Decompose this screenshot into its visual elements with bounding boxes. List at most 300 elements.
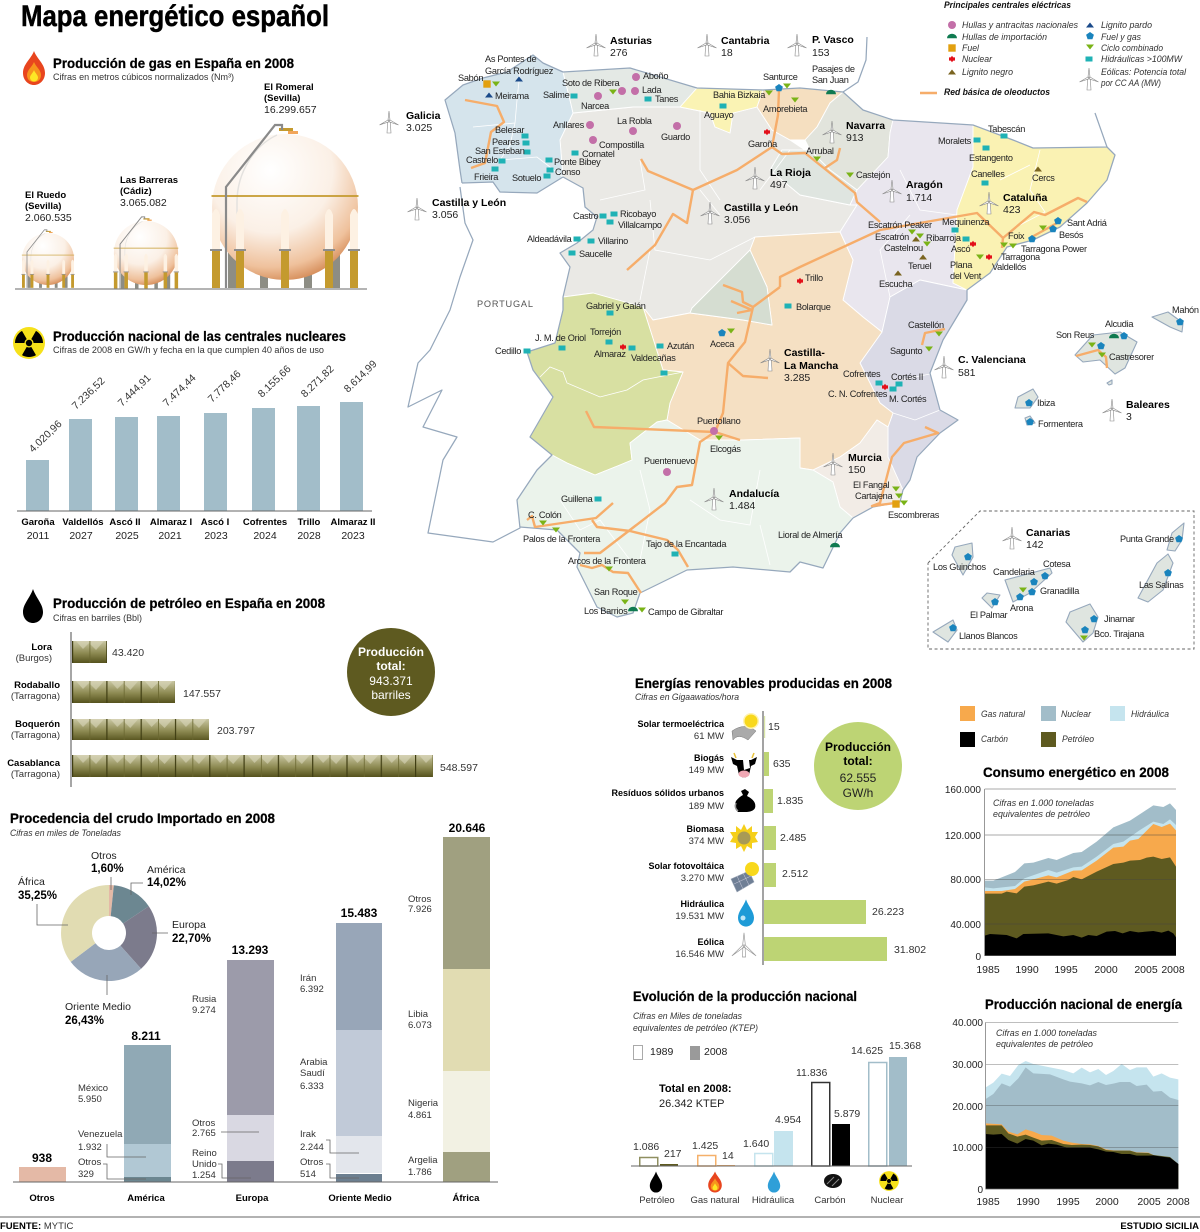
panel: oil production [7, 589, 478, 787]
renewables source labels [611, 719, 725, 960]
nuclear plant names: 2023 [204, 530, 228, 542]
plant name labels: Foix [1008, 231, 1025, 241]
production note: equivalentes de petróleo [996, 1039, 1093, 1050]
bar segment labels: Irak [300, 1129, 316, 1140]
region names and wind power values: 3.025 [406, 122, 432, 134]
consumption axis labels: 1985 [976, 964, 1000, 976]
legend: energy types: Carbón [981, 734, 1008, 745]
coast and border lines [408, 37, 1115, 617]
bar segment labels: Otros [192, 1118, 215, 1129]
bar chart: renewables: 26.223 [872, 906, 904, 918]
region names and wind power values: 1.484 [729, 500, 755, 512]
bar chart: renewables: 15 [768, 721, 780, 733]
plant name labels: Amorebieta [763, 104, 808, 114]
legend: energy types: Hidráulica [1131, 709, 1169, 720]
nuclear plant names: Almaraz II [331, 517, 375, 528]
bar segment labels: 2.765 [192, 1128, 216, 1139]
oil field labels: (Tarragona) [11, 730, 60, 741]
plant name labels: Arona [1010, 603, 1034, 613]
region names and wind power values: 142 [1026, 539, 1044, 551]
bar segment labels: 6.073 [408, 1020, 432, 1031]
bar category labels: América [127, 1193, 165, 1204]
region names and wind power values: 3.056 [724, 214, 750, 226]
evolution category icons and names [639, 1171, 903, 1206]
renewables source labels: 19.531 MW [675, 911, 724, 922]
plant name labels: Azután [667, 341, 694, 351]
nuclear plant names: 2028 [297, 530, 321, 542]
heading: production: Producción nacional de energía [985, 996, 1182, 1012]
plant name labels: El Palmar [970, 610, 1008, 620]
panel: gas production [15, 51, 367, 289]
renewables source labels: 61 MW [694, 731, 724, 742]
nuclear values: 8.155,66 [256, 363, 294, 400]
map legend: Hidráulicas >100MW [1101, 54, 1183, 65]
bar segment labels: 5.950 [78, 1094, 102, 1105]
plant name labels: Trillo [805, 273, 823, 283]
map legend: Lignito pardo [1101, 20, 1152, 31]
heading: renewables: Cifras en Gigaawatios/hora [635, 692, 739, 703]
production axis labels: 2008 [1166, 1196, 1190, 1208]
plant name labels: C. Colón [528, 510, 562, 520]
nuclear plant names: Valdellós [62, 517, 104, 528]
bar chart: evolution: 1.086 [633, 1141, 659, 1153]
evolution category icons and names: Gas natural [690, 1195, 740, 1206]
production axis labels: 30.000 [952, 1060, 983, 1071]
callout: total renewables: 62.555 [840, 771, 877, 785]
bar segment labels: Saudí [300, 1068, 325, 1079]
map legend: Lignito negro [962, 67, 1013, 78]
power plant markers: hydro [492, 94, 1008, 556]
bar chart: renewables: 1.835 [777, 795, 803, 807]
nuclear plant names: Ascó II [109, 517, 141, 528]
bar chart: evolution [631, 1040, 921, 1166]
callout: total renewables: Producción [825, 740, 891, 754]
consumption note: equivalentes de petróleo [993, 809, 1090, 820]
plant name labels: Compostilla [599, 140, 645, 150]
bar segment labels: 6.333 [300, 1081, 324, 1092]
tank labels [25, 82, 317, 224]
plant name labels: El Fangal [853, 480, 890, 490]
production axis labels: 1995 [1056, 1196, 1080, 1208]
legend: energy types: Petróleo [1062, 734, 1094, 745]
production axis labels: 10.000 [952, 1143, 983, 1154]
plant name labels: Saucelle [579, 249, 612, 259]
consumption axis labels: 1990 [1015, 964, 1039, 976]
bar segment labels: Venezuela [78, 1129, 123, 1140]
bar chart: evolution: 15.368 [889, 1040, 921, 1052]
map legend: por CC AA (MW) [1100, 78, 1161, 89]
heading: crude [10, 810, 275, 839]
plant name labels: Cortés II [891, 372, 923, 382]
bar chart: renewables: 31.802 [894, 944, 926, 956]
plant name labels: Las Salinas [1139, 580, 1184, 590]
region names and wind power values: Navarra [846, 120, 885, 132]
plant name labels: San Esteban [475, 146, 525, 156]
donut labels: 22,70% [172, 933, 211, 945]
plant name labels: Granadilla [1040, 586, 1080, 596]
region names and wind power values: 423 [1003, 204, 1021, 216]
region names and wind power values: Cataluña [1003, 192, 1048, 204]
plant name labels: As Pontes de [485, 54, 536, 64]
plant name labels: Estangento [969, 153, 1013, 163]
nuclear plant names: Trillo [298, 517, 321, 528]
bar segment labels: Libia [408, 1009, 429, 1020]
region names and wind power values: P. Vasco [812, 34, 854, 46]
bar segment labels: Rusia [192, 994, 217, 1005]
plant name labels: Frieira [474, 172, 499, 182]
plant name labels: C. N. Cofrentes [828, 389, 888, 399]
region names and wind power values: Aragón [906, 179, 943, 191]
plant name labels: Canelles [971, 169, 1005, 179]
bar chart: evolution: 1.425 [692, 1140, 718, 1152]
plant name labels: San Roque [594, 587, 638, 597]
plant name labels: Ricobayo [620, 209, 656, 219]
plant name labels: Tarragona Power [1021, 244, 1087, 254]
heading: crude: Cifras en miles de Toneladas [10, 828, 121, 839]
oil field labels: 548.597 [440, 762, 478, 774]
bar segment labels: 1.254 [192, 1170, 216, 1181]
legend: years: 1989 [650, 1046, 674, 1058]
plant name labels: Punta Grande [1120, 534, 1174, 544]
plant name labels: Castejón [856, 170, 890, 180]
legend: energy types [960, 706, 1169, 747]
panel: energy consumption [945, 764, 1185, 976]
donut labels: 35,25% [18, 890, 57, 902]
plant name labels: Pasajes de [812, 64, 855, 74]
plant name labels: Campo de Gibraltar [648, 607, 723, 617]
production axis labels: 1990 [1016, 1196, 1040, 1208]
donut labels: Oriente Medio [65, 1001, 131, 1013]
region names and wind power values: C. Valenciana [958, 354, 1026, 366]
consumption note: Cifras en 1.000 toneladas [993, 798, 1094, 809]
icon: radiation [13, 327, 45, 359]
plant name labels: Peares [492, 137, 520, 147]
renewables source labels: Resíduos sólidos urbanos [611, 788, 724, 798]
renewables source labels: Biogás [694, 753, 724, 763]
callout: total oil: Producción [358, 645, 424, 659]
heading: oil: Cifras en barriles (Bbl) [53, 613, 142, 624]
plant name labels: PORTUGAL [477, 299, 534, 309]
region names and wind power values: La Rioja [770, 167, 811, 179]
oil field labels: (Tarragona) [11, 691, 60, 702]
plant name labels: Puentenuevo [644, 456, 695, 466]
icon: cow [731, 753, 757, 778]
donut labels: América [147, 864, 186, 876]
callout: total oil: 943.371 [369, 674, 413, 688]
plant name labels: Cofrentes [843, 369, 881, 379]
plant name labels: Teruel [908, 261, 932, 271]
plant name labels: Aldeadávila [527, 234, 573, 244]
heading: nuclear: Producción nacional de las centrales nucleares [53, 328, 346, 344]
oil field labels: 147.557 [183, 688, 221, 700]
bar totals: 13.293 [232, 943, 269, 957]
region names and wind power values: 150 [848, 464, 866, 476]
tank labels: (Sevilla) [264, 93, 300, 104]
decorative province borders [473, 72, 1045, 565]
bar segment labels: 329 [78, 1169, 94, 1180]
icon: oil drop [23, 589, 43, 623]
callout: total oil: total: [376, 659, 406, 673]
plant name labels: Lada [642, 85, 662, 95]
plant name labels: Castro [573, 211, 599, 221]
plant name labels: Sabón [458, 73, 483, 83]
heading: evolution: Cifras en Miles de toneladas [633, 1011, 742, 1022]
map legend: Principales centrales eléctricas [944, 0, 1071, 11]
consumption axis labels: 2000 [1094, 964, 1118, 976]
bar chart: evolution: 217 [664, 1148, 682, 1160]
callout: total renewables: total: [843, 754, 873, 768]
callout: total renewables [814, 722, 902, 810]
oil pipelines [465, 90, 1107, 593]
nuclear values: 7.778,46 [206, 368, 244, 405]
heading: oil: Producción de petróleo en España en 2008 [53, 595, 325, 611]
tank labels: (Sevilla) [25, 201, 61, 212]
plant name labels: Belesar [495, 125, 524, 135]
tank labels: (Cádiz) [120, 186, 152, 197]
production axis labels: 2005 [1137, 1196, 1161, 1208]
heading: nuclear [53, 328, 346, 356]
plant name labels: Tarragona [1001, 252, 1041, 262]
map legend: Eólicas: Potencia total [1101, 67, 1187, 78]
plant name labels: Ascó [951, 244, 970, 254]
plant name labels: La Robla [617, 116, 653, 126]
plant name labels: Candelaria [993, 567, 1036, 577]
heading: renewables: Energías renovables producidas en 2008 [635, 675, 892, 691]
bar category labels: Europa [236, 1193, 269, 1204]
legend: energy types: Gas natural [981, 709, 1026, 720]
plant name labels: Cartajena [855, 491, 893, 501]
footer [0, 1217, 1200, 1232]
region names and wind power values: Andalucía [729, 488, 779, 500]
plant name labels: Tajo de la Encantada [646, 539, 727, 549]
tank labels: Las Barreras [120, 175, 178, 186]
plant name labels: Conso [555, 167, 580, 177]
plant name labels: Lioral de Almería [778, 530, 843, 540]
heading: renewables [635, 675, 892, 703]
bar segment labels: 1.932 [78, 1142, 102, 1153]
region names and wind power values: 913 [846, 132, 864, 144]
plant name labels: Ibiza [1037, 398, 1056, 408]
plant name labels: Arrubal [806, 146, 834, 156]
legend: years: 2008 [704, 1046, 728, 1058]
bar segment labels: México [78, 1083, 108, 1094]
bar totals: 8.211 [131, 1029, 161, 1043]
plant name labels: Sotuelo [512, 173, 541, 183]
panel: national production evolution [631, 988, 921, 1206]
bar chart: evolution: 14.625 [851, 1045, 883, 1057]
heading: evolution: Evolución de la producción nacional [633, 988, 857, 1004]
plant name labels: Plana [950, 260, 973, 270]
map legend: Fuel [962, 43, 980, 54]
map legend: Fuel y gas [1101, 32, 1141, 43]
icon: solar panel [731, 862, 759, 892]
bar segment labels: 1.786 [408, 1167, 432, 1178]
plant name labels: Jinamar [1104, 614, 1135, 624]
heading: evolution: equivalentes de petróleo (KTEP) [633, 1023, 758, 1034]
plant name labels: Soto de Ribera [562, 78, 621, 88]
region names and wind power values: Galicia [406, 110, 441, 122]
oil field labels: 43.420 [112, 647, 144, 659]
plant name labels: Llanos Blancos [959, 631, 1018, 641]
region names and wind power values: Canarias [1026, 527, 1071, 539]
tank labels: 2.060.535 [25, 212, 72, 224]
region names and wind power values: 1.714 [906, 192, 932, 204]
legend: energy types: Nuclear [1061, 709, 1092, 720]
renewables source labels: Eólica [697, 937, 725, 947]
plant name labels: Palos de la Frontera [523, 534, 601, 544]
renewables source labels: Solar termoeléctrica [637, 719, 725, 729]
plant name labels: Sagunto [890, 346, 922, 356]
plant name labels: del Vent [950, 271, 982, 281]
bar segment labels: Otros [408, 894, 431, 905]
nuclear plant names: 2024 [253, 530, 277, 542]
consumption axis labels: 120.000 [945, 831, 981, 842]
oil field labels: Boquerón [15, 719, 60, 730]
bar segment labels: 6.392 [300, 984, 324, 995]
donut labels: Europa [172, 919, 206, 931]
area chart: consumption [985, 789, 1176, 956]
oil field labels: 203.797 [217, 725, 255, 737]
nuclear values [27, 358, 380, 455]
region names and wind power values: Castilla y León [432, 197, 506, 209]
plant name labels: Escucha [879, 279, 913, 289]
plant name labels: Ribarroja [926, 233, 962, 243]
heading: gas: Producción de gas en España en 2008 [53, 55, 294, 71]
region names and wind power values: 3 [1126, 411, 1132, 423]
total note: 26.342 KTEP [659, 1098, 724, 1110]
region names and wind power values: Asturias [610, 35, 652, 47]
plant name labels: Escatrón Peaker [868, 220, 932, 230]
panel: renewables [611, 675, 926, 965]
plant name labels: J. M. de Oriol [535, 333, 586, 343]
bar chart: renewables: 2.512 [782, 868, 808, 880]
renewables source labels: 149 MW [689, 765, 724, 776]
renewables source labels: 16.546 MW [675, 949, 724, 960]
icon: water drop [738, 899, 754, 927]
area chart: production [986, 1022, 1178, 1189]
evolution category icons and names: Nuclear [871, 1195, 903, 1206]
consumption axis labels: 0 [975, 952, 981, 963]
renewables source labels: Hidráulica [680, 899, 725, 909]
renewables source labels: Biomasa [686, 824, 725, 834]
production axis labels [952, 1018, 1190, 1208]
bar segment labels: 2.244 [300, 1142, 324, 1153]
bar segment labels: Irán [300, 973, 316, 984]
bar segment labels: Reino [192, 1148, 217, 1159]
bar chart: renewables [763, 711, 926, 965]
plant name labels: Castellón [908, 320, 944, 330]
nuclear values: 8.271,82 [299, 363, 337, 400]
plant name labels: Salime [543, 90, 570, 100]
plant name labels: Tabescán [988, 124, 1025, 134]
nuclear plant names: Garoña [21, 517, 55, 528]
region names and wind power values: 18 [721, 47, 733, 59]
bar category labels: Otros [29, 1193, 55, 1204]
plant name labels: Torrejón [590, 327, 621, 337]
map legend: Ciclo combinado [1101, 43, 1163, 54]
plant name labels: Cotesa [1043, 559, 1072, 569]
plant name labels: Arcos de la Frontera [568, 556, 647, 566]
consumption axis labels: 2005 [1134, 964, 1158, 976]
consumption axis labels: 160.000 [945, 785, 981, 796]
total note: Total en 2008: [659, 1083, 732, 1095]
plant name labels: Gabriel y Galán [586, 301, 646, 311]
consumption note [993, 798, 1094, 820]
map legend: Hullas de importación [962, 32, 1047, 43]
power plant markers: coal [485, 73, 1119, 611]
evolution category icons and names: Hidráulica [752, 1195, 795, 1206]
plant name labels: Escatrón [875, 232, 909, 242]
heading: gas: Cifras en metros cúbicos normalizados (Nm³) [53, 72, 234, 83]
donut labels: 26,43% [65, 1015, 104, 1027]
plant name labels: García Rodríguez [485, 66, 554, 76]
bar chart: evolution: 1.640 [743, 1138, 769, 1150]
production axis labels: 20.000 [952, 1102, 983, 1113]
map regions [445, 55, 1115, 617]
plant name labels: Cercs [1032, 173, 1055, 183]
panel: national energy production [952, 996, 1190, 1208]
heading: consumption: Consumo energético en 2008 [983, 764, 1169, 780]
donut labels [18, 850, 211, 1027]
callout: total oil: barriles [371, 688, 411, 702]
legend: years [634, 1046, 728, 1060]
region names and wind power values: Baleares [1126, 399, 1170, 411]
production axis labels: 0 [977, 1185, 983, 1196]
tank labels: El Romeral [264, 82, 314, 93]
bar totals [32, 821, 486, 1165]
plant name labels: Meirama [495, 91, 530, 101]
plant name labels: Tanes [655, 94, 679, 104]
plant name labels: Anllares [553, 120, 585, 130]
map legend: Nuclear [962, 54, 993, 65]
plant name labels: Villarino [598, 236, 628, 246]
bar totals: 938 [32, 1151, 52, 1165]
bar chart: renewables: 2.485 [780, 832, 806, 844]
bar segment labels: Arabia [300, 1057, 328, 1068]
plant name labels: Besós [1059, 230, 1084, 240]
icon: solar thermal [732, 713, 759, 740]
heading: gas [53, 55, 294, 83]
donut labels: África [18, 875, 45, 888]
power plant markers: fuel, gas and nuclear [483, 80, 1184, 633]
plant name labels: Guardo [661, 132, 690, 142]
plant name labels: Puertollano [697, 416, 741, 426]
production axis labels: 2000 [1095, 1196, 1119, 1208]
bar segment labels: Otros [78, 1157, 101, 1168]
footer: FUENTE: MYTIC [0, 1221, 74, 1232]
region names and wind power values: 276 [610, 47, 628, 59]
plant name labels: Los Barrios [584, 606, 628, 616]
bar segment labels: Otros [300, 1157, 323, 1168]
bar category labels [29, 1193, 480, 1204]
production axis labels: 1985 [976, 1196, 1000, 1208]
oil field labels: Rodaballo [14, 680, 60, 691]
nuclear plant names: 2027 [69, 530, 93, 542]
production note: Cifras en 1.000 toneladas [996, 1028, 1097, 1039]
bar chart: nuclear [17, 402, 372, 511]
icon: wind turbine [732, 933, 756, 957]
region names and wind power values [406, 34, 1170, 551]
tank labels: 3.065.082 [120, 197, 167, 209]
plant name labels: Aguayo [704, 110, 734, 120]
oil field labels [7, 642, 478, 780]
bar totals: 20.646 [449, 821, 486, 835]
nuclear plant names: 2011 [27, 530, 49, 542]
plant name labels: M. Cortés [889, 394, 927, 404]
bar segment labels: Argelia [408, 1155, 438, 1166]
bar segment labels: Nigeria [408, 1098, 439, 1109]
plant name labels: Valdellós [992, 262, 1027, 272]
